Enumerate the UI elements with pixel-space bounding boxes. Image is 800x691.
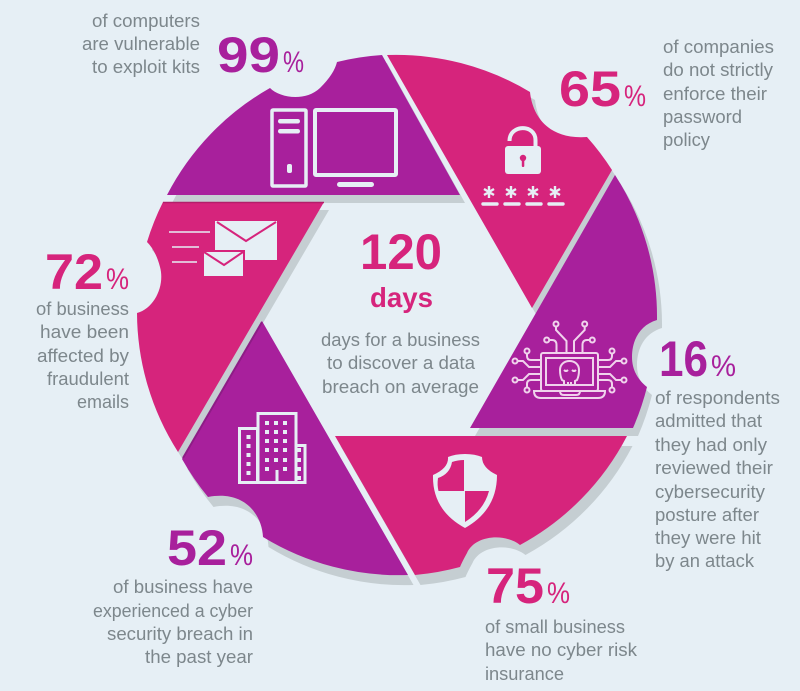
stat: 72% of business: have been (40, 322, 129, 342)
stat: 72% of business: fraudulent (47, 369, 129, 389)
stat: 16% of respondents: posture after (655, 505, 759, 525)
stat: 16% of respondents: by an attack (655, 551, 755, 571)
stat: 16% of respondents (655, 331, 780, 571)
icon: desktop computer (272, 110, 396, 187)
stat: 75% of small business: have no cyber risk (485, 640, 638, 660)
stat: 72% of business: of business (36, 299, 129, 319)
stat: 72% of business: emails (77, 392, 129, 412)
center: 120 days: breach on average (322, 377, 479, 397)
icon: laptop with skull and circuits (512, 322, 626, 398)
panel: password segment (387, 55, 612, 308)
stat: 72% of business: 72 (45, 244, 103, 300)
stat: 99% of computers: are vulnerable (82, 34, 200, 54)
icon: envelopes (169, 221, 277, 277)
stat: 52% of business: experienced a cyber (93, 601, 253, 621)
stat: 52% of business: % (230, 539, 253, 572)
stat: 72% of business: affected by (37, 346, 129, 366)
stat: 72% of business: % (106, 263, 129, 296)
segment shadows (142, 63, 662, 585)
stat: 52% of business (93, 520, 253, 667)
icon: shield (433, 454, 497, 528)
stat: 16% of respondents: they had only (655, 435, 767, 455)
panel: computers segment (167, 55, 460, 195)
panel: respondents segment (470, 175, 657, 428)
stat: 75% of small business: of small business (485, 617, 625, 637)
panel: emails segment (137, 202, 324, 452)
stat: 16% of respondents: they were hit (655, 528, 761, 548)
stat: 16% of respondents: reviewed their (655, 458, 773, 478)
stat: 52% of business: of business have (113, 577, 253, 597)
stat: 16% of respondents: admitted that (655, 411, 762, 431)
icon: padlock with password (483, 128, 563, 204)
center: 120 days: 120 (360, 224, 442, 280)
stat: 52% of business: security breach in (107, 624, 253, 644)
icon: office buildings (240, 414, 305, 484)
stat: 52% of business: the past year (145, 647, 253, 667)
stat: 16% of respondents: 16 (659, 331, 708, 387)
center: 120 days (321, 224, 480, 397)
stat: 99% of computers: of computers (92, 11, 200, 31)
stat: 52% of business: 52 (167, 520, 227, 576)
panel: breach segment (182, 321, 408, 575)
center: 120 days: days for a business (321, 330, 480, 350)
stat: 75% of small business: 75 (486, 558, 544, 614)
stat: 16% of respondents: % (711, 350, 736, 383)
stat: 65% of companies: % (624, 80, 646, 113)
stat: 99% of computers: 99 (217, 27, 280, 83)
stat: 65% of companies: do not strictly (663, 60, 773, 80)
center: 120 days: days (370, 282, 433, 313)
stat: 75% of small business: insurance (485, 664, 564, 684)
stat: 16% of respondents: cybersecurity (655, 482, 765, 502)
stat: 72% of business (36, 244, 129, 412)
stat: 99% of computers: to exploit kits (92, 57, 200, 77)
stat: 65% of companies: policy (663, 130, 710, 150)
stat: 75% of small business: % (547, 577, 570, 610)
stat: 65% of companies (559, 37, 774, 150)
stat: 65% of companies: of companies (663, 37, 774, 57)
stat: 16% of respondents: of respondents (655, 388, 780, 408)
panel: insurance segment (335, 436, 627, 575)
stat: 99% of computers: % (283, 46, 304, 79)
stat: 65% of companies: enforce their (663, 84, 767, 104)
stat: 75% of small business (485, 558, 638, 684)
stat: 99% of computers (82, 11, 304, 83)
stat: 65% of companies: password (663, 107, 742, 127)
center: 120 days: to discover a data (327, 353, 476, 373)
stat: 65% of companies: 65 (559, 61, 621, 117)
